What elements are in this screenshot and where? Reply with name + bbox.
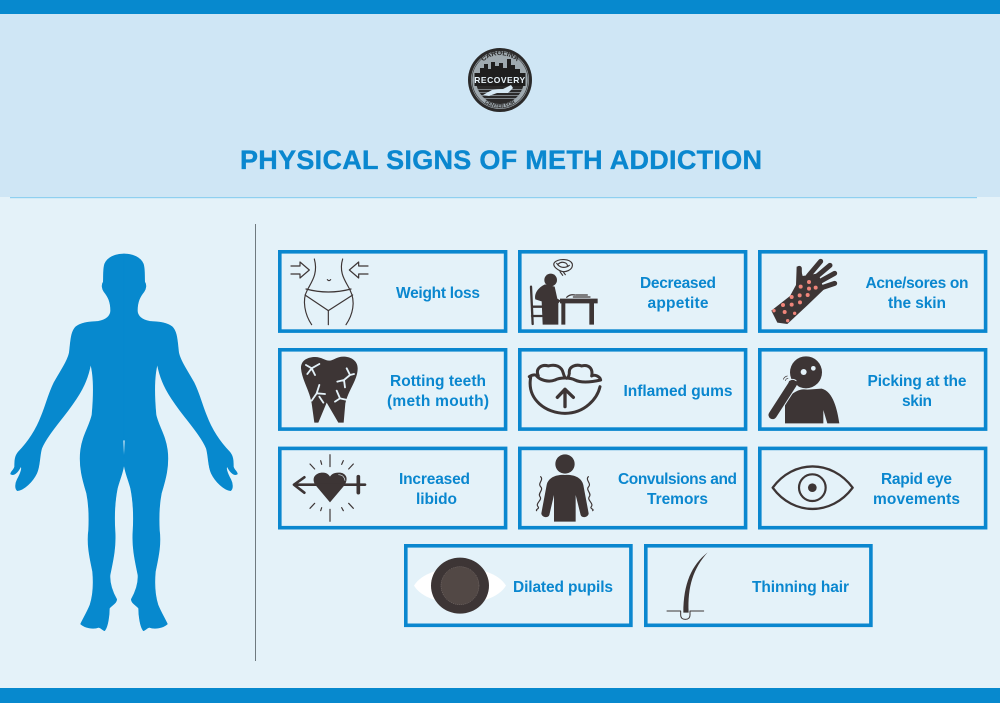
label: Inflamed gums [624, 383, 732, 400]
card: convulsions and tremors [520, 448, 746, 528]
card: acne and sores [760, 252, 986, 331]
label: Thinning hair [752, 579, 849, 596]
card: convulsions and tremors: Tremors [647, 491, 708, 508]
card: rapid eye movements: movements [873, 491, 960, 508]
vertical divider [255, 224, 256, 661]
card: acne and sores: the skin [888, 295, 946, 312]
icon: person sitting at table [531, 260, 598, 325]
header band [0, 14, 1000, 197]
card: weight loss [280, 252, 506, 331]
logo: Carolina Center for Recovery: CENTER FOR [485, 100, 516, 108]
label: Rapid eye [881, 471, 952, 488]
label: Increased [399, 471, 470, 488]
logo: Carolina Center for Recovery: RECOVERY [474, 75, 526, 85]
card: dilated pupils [406, 546, 631, 625]
label: Dilated pupils [513, 579, 613, 596]
icon: arm with sores [771, 261, 835, 324]
human body silhouette [11, 254, 237, 631]
card: rapid eye movements [760, 448, 986, 528]
card: rotting teeth: (meth mouth) [387, 393, 489, 410]
card: decreased appetite [520, 252, 746, 331]
card: picking at the skin [760, 350, 986, 429]
icon: hair follicle [667, 552, 708, 619]
top bar [0, 0, 1000, 14]
label: Rotting teeth [390, 373, 486, 390]
icon: trembling person [536, 454, 593, 522]
card: picking at the skin: skin [902, 393, 932, 410]
label: Picking at the [868, 373, 967, 390]
label: Convulsions and [618, 471, 737, 488]
label: Weight loss [396, 285, 480, 302]
logo: Carolina Center for Recovery: CAROLINA [481, 51, 518, 62]
icon: dilated eye [414, 558, 506, 614]
icon: cracked tooth [301, 357, 358, 423]
title: PHYSICAL SIGNS OF METH ADDICTION [240, 145, 762, 175]
icon: waist with inward arrows [291, 259, 368, 325]
icon: eye [773, 466, 853, 509]
icon: person picking face [773, 356, 839, 423]
card: increased libido: libido [416, 491, 457, 508]
label: Acne/sores on [866, 275, 968, 292]
card: decreased appetite: appetite [648, 295, 709, 312]
card: increased libido [280, 448, 506, 528]
card: inflamed gums [520, 350, 746, 429]
card: rotting teeth [280, 350, 506, 429]
logo: Carolina Center for Recovery [468, 48, 532, 112]
card: thinning hair [646, 546, 871, 625]
icon: gums with arrow [529, 365, 601, 413]
label: Decreased [640, 275, 716, 292]
bottom bar [0, 688, 1000, 703]
icon: heart with arrow [294, 455, 365, 521]
